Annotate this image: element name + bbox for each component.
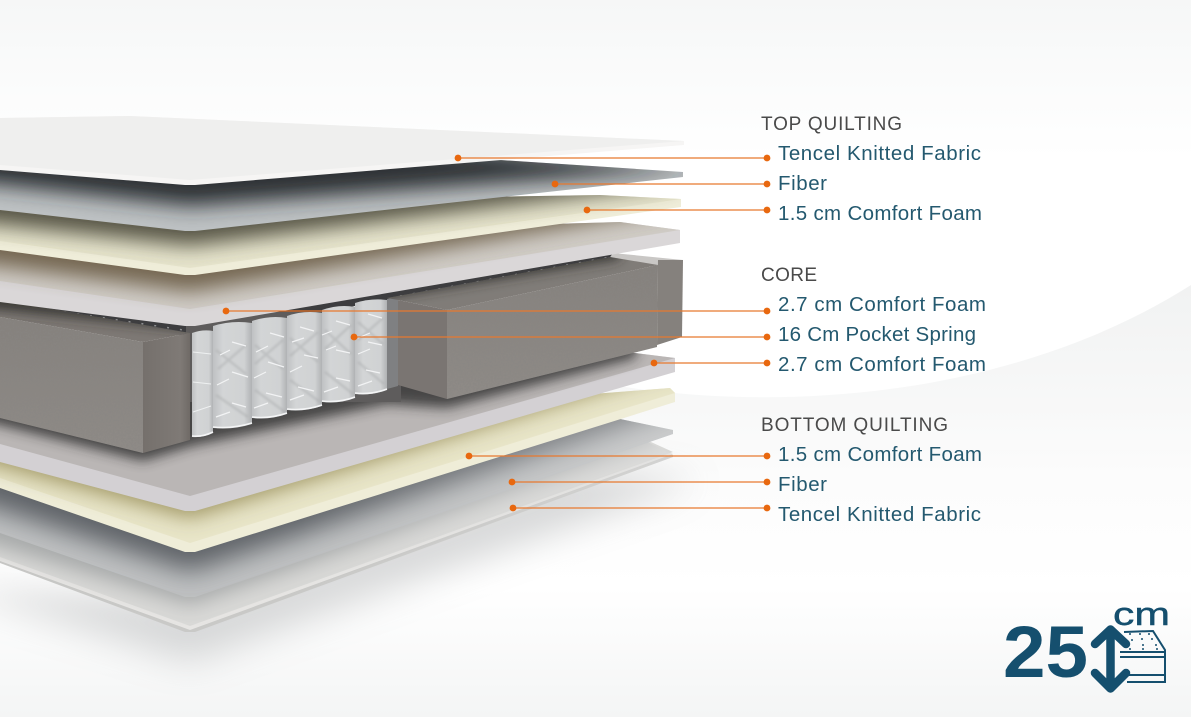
number: 25: 25 xyxy=(1003,612,1088,693)
spring column xyxy=(213,322,252,428)
icon: mattress xyxy=(1120,631,1165,682)
layer: top tencel knitted fabric xyxy=(0,116,684,185)
pocket springs xyxy=(186,297,401,437)
spring column xyxy=(192,330,213,437)
leader: bottom foam xyxy=(466,453,770,459)
ground shadow xyxy=(0,470,700,662)
label: fiber: Fiber xyxy=(778,473,827,496)
foam block: left xyxy=(0,302,190,453)
label: comfort foam: 2.7 cm Comfort Foam xyxy=(778,353,986,376)
leader: top foam xyxy=(584,207,770,213)
leader: core upper foam xyxy=(223,308,770,314)
spring column xyxy=(322,306,355,402)
label: comfort foam: 1.5 cm Comfort Foam xyxy=(778,443,982,466)
label: tencel knitted fabric: Tencel Knitted Fabric xyxy=(778,503,981,526)
label: tencel knitted fabric: Tencel Knitted Fabric xyxy=(778,142,981,165)
icon: double arrow xyxy=(1095,630,1126,688)
label group: core xyxy=(761,265,986,376)
label group: bottom quilting xyxy=(761,415,982,526)
spring column xyxy=(252,317,287,418)
spring column xyxy=(355,299,387,394)
back cap xyxy=(608,253,683,268)
leader: bottom fiber xyxy=(509,479,770,485)
height badge: 25 cm xyxy=(1003,596,1170,693)
foam block: right xyxy=(380,245,683,399)
leader: bottom fabric xyxy=(510,505,770,511)
label group: top quilting xyxy=(761,114,982,225)
unit: cm: cm xyxy=(1113,596,1170,632)
label: pocket spring: 16 Cm Pocket Spring xyxy=(778,323,976,346)
leader: pocket spring xyxy=(351,334,770,340)
spring pocket coil strip xyxy=(0,254,612,337)
label: fiber: Fiber xyxy=(778,172,827,195)
layer: top fiber xyxy=(0,160,683,231)
layer: upper core comfort foam xyxy=(0,222,680,326)
heading: top quilting: TOP QUILTING xyxy=(761,114,902,135)
layer: bottom fiber xyxy=(0,419,673,597)
label: comfort foam: 1.5 cm Comfort Foam xyxy=(778,202,982,225)
heading: core: CORE xyxy=(761,265,817,286)
leader: top fabric xyxy=(455,155,770,161)
layer: bottom tencel knitted fabric xyxy=(0,442,673,632)
leader lines xyxy=(223,155,770,511)
leader: top fiber xyxy=(552,181,770,187)
mattress cross-section xyxy=(0,116,700,662)
layer: bottom comfort foam cream xyxy=(0,388,675,552)
heading: bottom quilting: BOTTOM QUILTING xyxy=(761,415,948,436)
leader: core lower foam xyxy=(651,360,770,366)
layer: top comfort foam cream xyxy=(0,195,681,275)
layer: lower core comfort foam xyxy=(0,335,675,511)
spring column xyxy=(287,312,322,410)
label: comfort foam: 2.7 cm Comfort Foam xyxy=(778,293,986,316)
